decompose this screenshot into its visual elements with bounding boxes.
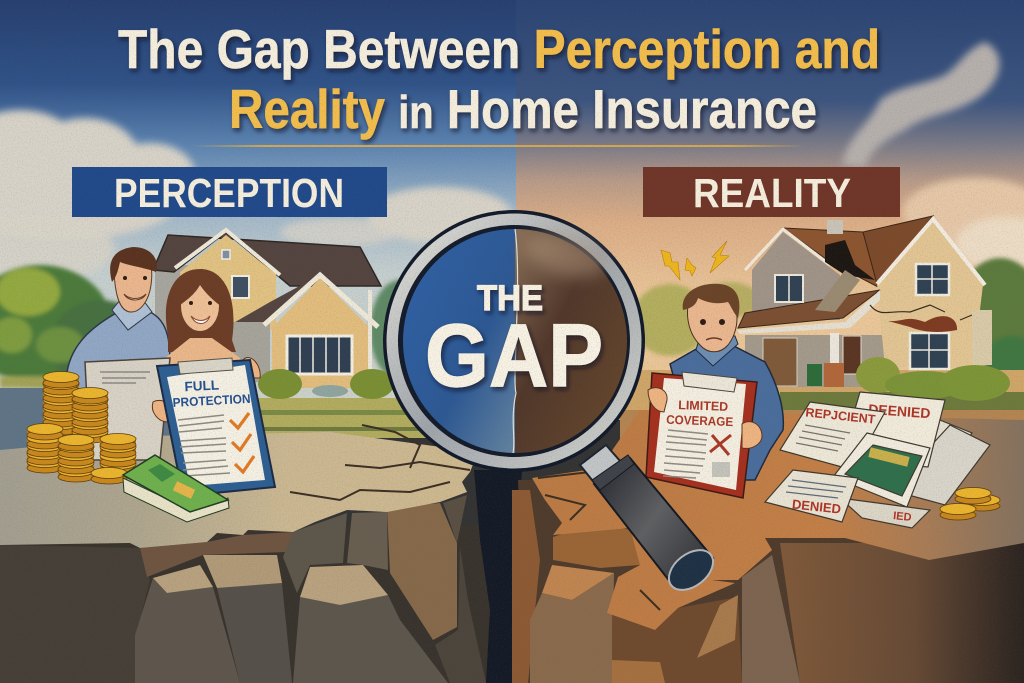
heading: perception: PERCEPTION [114, 170, 344, 216]
chasm: central crack [474, 470, 522, 683]
person: woman smiling [160, 269, 245, 375]
magnifying glass lens [383, 210, 645, 472]
ground: left pond and lawn [0, 388, 516, 458]
paper pile: denied documents [765, 392, 990, 528]
clouds: left sky [0, 110, 512, 282]
house: perception home [153, 230, 394, 399]
cash: stack of banknotes [123, 455, 229, 522]
cliff: right rock face [512, 480, 1024, 683]
document: papers behind clipboard [85, 358, 170, 460]
cracks in the ground [290, 425, 660, 610]
clipboard title: FULL PROTECTION [171, 376, 251, 410]
stamp: DENIED: DENIED [791, 496, 842, 517]
stamp: DEENIED: DEENIED [868, 401, 931, 421]
stamp: IED fragment: IED [893, 510, 912, 524]
coverage lines and X mark [663, 430, 731, 478]
clipboard title: FULL PROTECTION: FULL [184, 377, 219, 394]
person: worried man [670, 284, 783, 480]
house: reality damaged home [737, 216, 1010, 401]
magnifying glass handle [580, 445, 721, 598]
coins: stacks of gold [27, 372, 136, 484]
stamp: REPJCIENT: REPJCIENT [805, 405, 876, 427]
heading: reality: REALITY [693, 170, 851, 216]
background: reality sky [516, 0, 1024, 420]
clipboard title: FULL PROTECTION: PROTECTION [172, 392, 251, 410]
background: perception sky [0, 0, 516, 420]
person: man smiling [67, 247, 170, 400]
crust: right dry ground [532, 410, 1024, 630]
clipboard title: LIMITED COVERAGE [666, 398, 734, 429]
clipboard: full protection [157, 358, 275, 496]
crust: left cracked ground [0, 432, 478, 548]
clipboard title: LIMITED COVERAGE: COVERAGE [666, 413, 733, 429]
coins: reality scattered gold [940, 488, 1000, 520]
title underline [190, 145, 807, 147]
trees: left [0, 265, 430, 390]
ground: right lawn and dirt [516, 370, 1024, 540]
cliff: left rock face [0, 495, 500, 683]
title: Reality in Home Insurance [229, 78, 817, 140]
lens label: THE GAP: THE [477, 279, 543, 318]
lens label: THE GAP: GAP [425, 305, 603, 405]
checklist lines and check marks [178, 413, 254, 476]
hands of the worried man [648, 388, 762, 448]
hands of the woman [152, 358, 260, 422]
clipboard title: LIMITED COVERAGE: LIMITED [678, 398, 728, 414]
title [118, 18, 880, 140]
clipboard: limited coverage [646, 372, 762, 498]
clouds and smoke: right sky [842, 42, 1024, 273]
trees: right [632, 258, 1024, 384]
heading: reality [643, 167, 900, 217]
icon: stress lightning bolts [661, 241, 729, 280]
title: The Gap Between Perception and [118, 18, 880, 80]
